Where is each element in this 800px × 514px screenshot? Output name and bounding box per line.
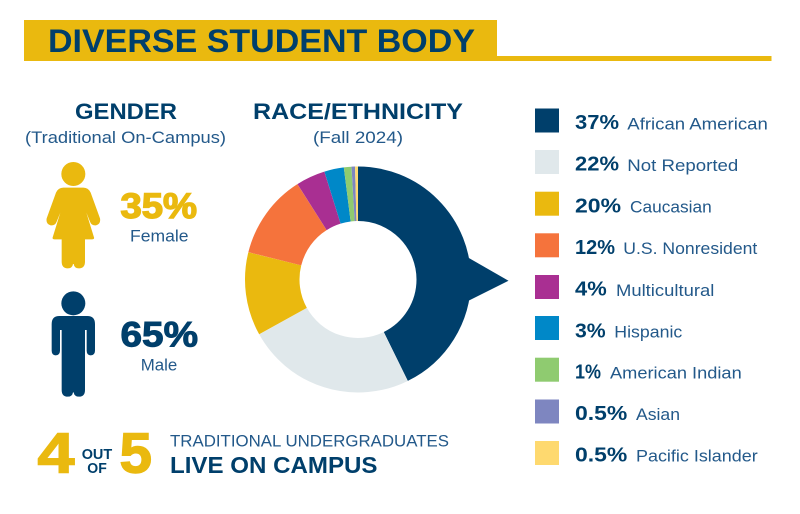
legend item: Pacific Islander: 0.5% (575, 444, 627, 467)
legend item: Pacific Islander: Pacific Islander (636, 447, 758, 466)
legend item: Caucasian: 20% (575, 194, 621, 217)
legend item: Not Reported (535, 150, 738, 176)
male statistic (120, 314, 198, 374)
title: DIVERSE STUDENT BODY (48, 23, 475, 59)
legend item: U.S. Nonresident: 12% (575, 236, 615, 259)
heading: gender: (Traditional On-Campus) (25, 128, 226, 147)
legend item: African American: African American (627, 114, 768, 134)
legend item: African American: 37% (575, 111, 619, 134)
header banner (24, 20, 772, 61)
callout: 4 out of 5 live on campus: 4 (38, 422, 75, 486)
legend item: American Indian: 1% (575, 360, 601, 383)
callout: 4 out of 5 live on campus: TRADITIONAL UNDERGRADUATES (170, 432, 449, 450)
callout: 4 out of 5 live on campus: OUT (82, 447, 112, 463)
donut chart: race/ethnicity (240, 161, 476, 398)
legend item: Asian: 0.5% (575, 402, 627, 425)
legend item: Asian (535, 400, 680, 425)
arrow: donut pointer to legend (468, 258, 508, 301)
legend item: Pacific Islander (535, 441, 758, 467)
legend item: Hispanic: Hispanic (614, 322, 683, 342)
heading: race/ethnicity (253, 99, 463, 147)
legend item: Not Reported: 22% (575, 153, 619, 176)
legend item: American Indian: American Indian (610, 364, 742, 382)
legend item: Asian: Asian (636, 405, 680, 424)
legend item: Hispanic (535, 316, 683, 342)
heading: gender (25, 99, 226, 147)
heading: race/ethnicity: (Fall 2024) (313, 128, 403, 147)
icon: female figure (46, 162, 100, 268)
callout: 4 out of 5 live on campus: LIVE ON CAMPUS (170, 452, 378, 478)
callout: 4 out of 5 live on campus: OF (87, 461, 107, 477)
legend item: Caucasian (535, 192, 712, 217)
legend item: U.S. Nonresident (535, 233, 758, 259)
legend item: African American (535, 108, 768, 134)
legend item: Multicultural: 4% (575, 278, 607, 301)
legend (535, 108, 768, 467)
callout: 4 out of 5 live on campus (38, 422, 449, 486)
legend item: Hispanic: 3% (575, 319, 606, 342)
female statistic: 35% (120, 186, 197, 226)
legend item: American Indian (535, 358, 742, 383)
female statistic (120, 186, 197, 246)
male statistic: Male (141, 356, 177, 374)
female statistic: Female (130, 226, 188, 246)
legend item: U.S. Nonresident: U.S. Nonresident (623, 239, 758, 258)
legend item: Caucasian: Caucasian (630, 198, 712, 216)
male statistic: 65% (120, 314, 198, 354)
legend item: Multicultural (535, 275, 714, 301)
heading: gender: GENDER (75, 99, 177, 124)
callout: 4 out of 5 live on campus: 5 (120, 422, 152, 486)
legend item: Multicultural: Multicultural (616, 281, 714, 300)
icon: male figure (52, 291, 95, 397)
heading: race/ethnicity: RACE/ETHNICITY (253, 99, 463, 124)
legend item: Not Reported: Not Reported (627, 156, 738, 175)
